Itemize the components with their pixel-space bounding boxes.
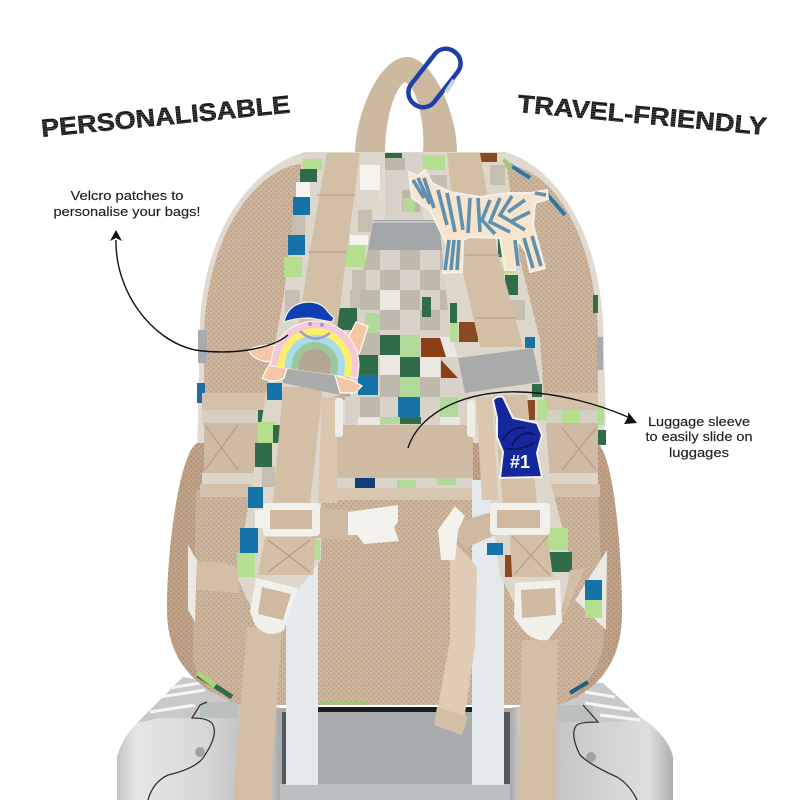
reflective bar between straps [366,220,470,250]
rainbow arms and legs [248,322,368,393]
padded strap centre [447,153,553,577]
icon: blue carabiner [403,43,466,113]
body: checker edge and upper mesh panel [197,152,606,450]
strap checks [237,159,365,577]
padded strap centre [258,153,360,575]
right shoulder strap [423,153,572,625]
center checker panel [338,240,470,440]
callout text: luggage sleeve: luggages [669,446,729,460]
patch: rainbow with cap [248,302,368,393]
chest strap buckle: left [263,503,399,544]
top handle [355,57,457,152]
backpack body [167,152,622,705]
rainbow cap [284,302,334,322]
callout text: luggage sleeve: to easily slide on [646,430,753,444]
lower pouch [167,443,622,704]
trolley poles [286,480,504,785]
patch: zebra [409,170,548,273]
chest strap buckle: right [438,503,550,560]
reflective patch [458,348,540,393]
arrow: luggage sleeve [408,392,637,448]
arrow: velcro patches [110,230,288,352]
callout text: luggage sleeve: Luggage sleeve [648,415,750,429]
patch: foam finger number one: #1 [510,452,530,472]
callout text: velcro patches: personalise your bags! [54,205,200,219]
patch: foam finger number one [493,396,542,478]
strap checks [423,155,568,550]
side loops [188,545,607,630]
callout text: velcro patches: Velcro patches to [70,189,184,203]
heading: personalisable: PERSONALISABLE [40,91,291,143]
reflective patch [283,355,350,397]
hanging strap end [434,537,477,735]
left shoulder strap [237,153,385,610]
heading: travel-friendly: TRAVEL-FRIENDLY [516,90,768,141]
lower straps [233,627,558,800]
suitcase [117,677,673,800]
luggage sleeve [332,425,475,500]
lower strap sliders [250,578,562,640]
zipper [318,397,337,503]
zipper [476,397,498,500]
upper mesh centre gap [385,153,423,220]
